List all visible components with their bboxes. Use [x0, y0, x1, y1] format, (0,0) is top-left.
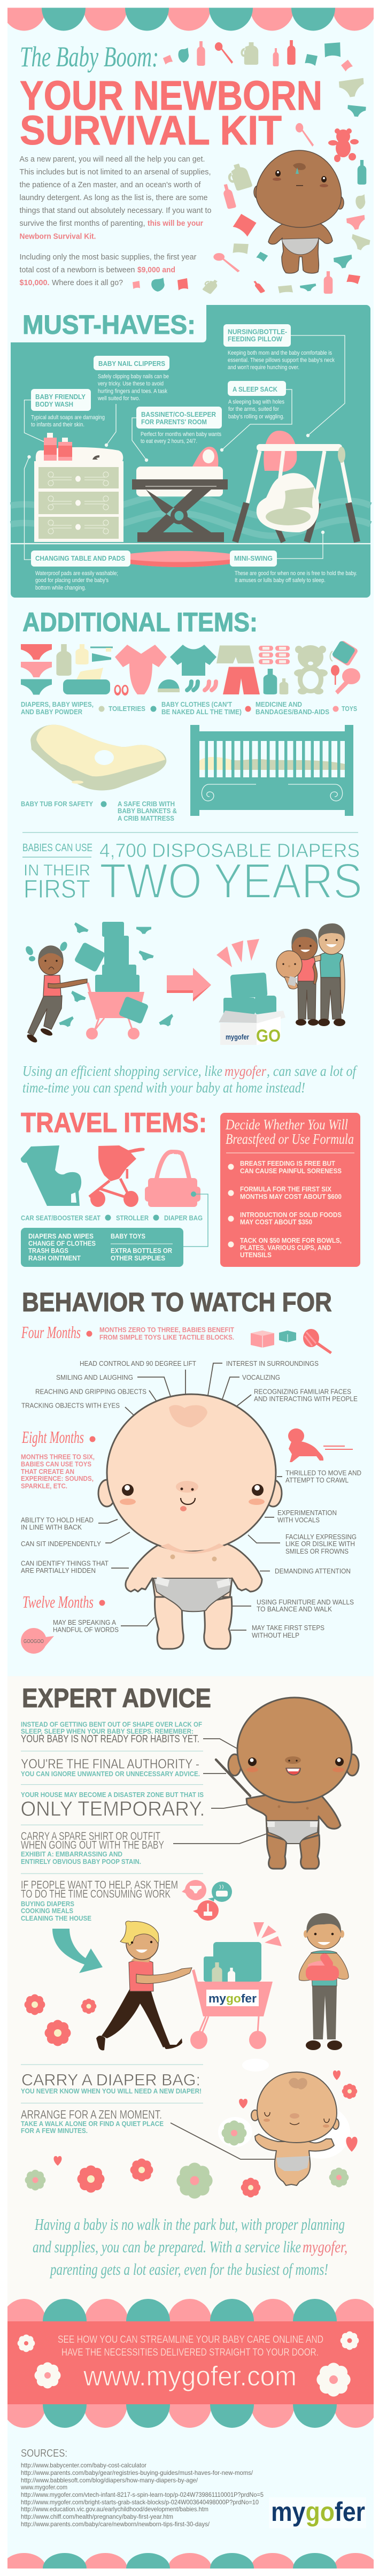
advice: zen moment: [21, 2108, 164, 2135]
intro text: As a new parent, you will need all the help you can get.: [19, 155, 205, 164]
sleep sack label: A SLEEP SACK: [233, 385, 278, 393]
panel: breastfeed or formula: Decide Whether You Will: [225, 1117, 348, 1133]
twelve months note: [22, 1592, 354, 1639]
hero baby: [253, 146, 346, 273]
icon: baby tub: [30, 725, 166, 791]
speech bubble: [21, 1628, 54, 1654]
sources: http://www.parents.com/baby/gear/registries-buying-guides/must-haves-for-new-moms/: [21, 2469, 253, 2476]
script callout: mygofer: , can save a lot of: [267, 1063, 358, 1079]
panel: breastfeed or formula: BREAST FEEDING IS FREE BUT: [240, 1159, 335, 1167]
milestone labels: eight months: ABILITY TO HOLD HEAD: [21, 1516, 94, 1524]
bassinet label: BASSINET/CO-SLEEPER: [141, 410, 216, 418]
body wash label: Typical adult soaps are damaging: [31, 414, 105, 421]
intro text: $10,000.: [19, 278, 49, 287]
sources: http://www.babycenter.com/baby-cost-calculator: [21, 2462, 146, 2469]
banner flowers: [18, 2332, 359, 2397]
bassinet label: FOR PARENTS' ROOM: [141, 418, 207, 426]
labels: additional items: DIAPERS, BABY WIPES,: [21, 700, 94, 708]
body wash label: BODY WASH: [35, 400, 73, 408]
milestone labels: four months: VOCALIZING: [242, 1373, 280, 1381]
nursing pillow label: NURSING/BOTTLE-: [228, 327, 287, 336]
twelve months note: HANDFUL OF WORDS: [53, 1626, 119, 1634]
advice: sleep: INSTEAD OF GETTING BENT OUT OF SHAPE OVER LACK OF: [21, 1721, 202, 1729]
illustration: man with laundry: [299, 1913, 349, 2050]
heading: must-haves: MUST-HAVES:: [22, 310, 196, 340]
panel: must-haves: [7, 302, 370, 598]
labels: additional items: AND BABY POWDER: [21, 708, 83, 716]
twelve months note: USING FURNITURE AND WALLS: [257, 1598, 354, 1606]
intro text: things that stand out absolutely necessary. If you want to: [19, 206, 212, 215]
labels: additional items: BANDAGES/BAND-AIDS: [256, 708, 329, 716]
sources: http://www.parents.com/baby/care/newborn/newborn-tips-first-30-days/: [21, 2520, 210, 2528]
eight months note: SPARKLE, ETC.: [21, 1482, 67, 1490]
milestone labels: four months: HEAD CONTROL AND 90 DEGREE LIFT: [80, 1359, 196, 1367]
sources: http://www.mygofer.com/bright-starts-grab-stack-blocks/p-024W003640498000P?prdNo=10: [21, 2498, 259, 2506]
icon: crawling baby: [288, 1428, 353, 1462]
nursing pillow label: Keeping both mom and the baby comfortable is: [228, 350, 332, 356]
intro text: total cost of a newborn is between: [19, 265, 135, 274]
changing table label: Waterproof pads are easily washable;: [35, 570, 118, 577]
heading: travel items: TRAVEL ITEMS:: [21, 1107, 207, 1138]
call to action banner: [7, 2321, 374, 2404]
advice: spare outfit: CARRY A SPARE SHIRT OR OUTFIT: [21, 1830, 160, 1843]
callout dots: [27, 434, 324, 534]
sleep sack label: [228, 381, 286, 420]
sources: http://www.babblesoft.com/blog/diapers/how-many-diapers-by-age/: [21, 2476, 198, 2484]
four months note: FROM SIMPLE TOYS LIKE TACTILE BLOCKS.: [99, 1333, 234, 1341]
callout lines: [25, 335, 345, 560]
sources: [20, 2448, 264, 2528]
milestone labels: eight months: THRILLED TO MOVE AND: [285, 1469, 361, 1477]
labels: additional items: BE NAKED ALL THE TIME): [161, 708, 242, 716]
advice: spare outfit: [21, 1830, 164, 1866]
title: SURVIVAL KIT: [20, 108, 282, 154]
milestone labels: eight months: EXPERIMENTATION: [277, 1509, 337, 1517]
intro text: Newborn Survival Kit.: [19, 232, 96, 241]
twelve months note: MAY BE SPEAKING A: [53, 1618, 116, 1626]
labels: additional items: TOYS: [342, 705, 357, 713]
advice dividers and lines: [21, 1739, 275, 2159]
arrow: [167, 968, 211, 1002]
panel: breastfeed or formula: Breastfeed or Use Formula: [226, 1131, 354, 1147]
labels: tub and crib: BABY BLANKETS &: [118, 807, 177, 815]
panel: breastfeed or formula: [220, 1113, 360, 1267]
sources: http://www.education.vic.gov.au/earlychildhood/development/babies.htm: [21, 2505, 208, 2513]
panel: breastfeed or formula: TACK ON $50 MORE FOR BOWLS,: [240, 1236, 342, 1244]
body wash label: [31, 389, 105, 428]
milestone labels: four months: AND INTERACTING WITH PEOPLE: [254, 1395, 358, 1403]
labels: additional items: [21, 700, 357, 716]
advice: final authority: [21, 1757, 200, 1778]
divider: [22, 832, 358, 833]
advice: sleep: [21, 1721, 202, 1745]
script callout: mygofer: time-time you can spend with your baby at home instead!: [22, 1080, 305, 1096]
mini-swing label: MINI-SWING: [234, 554, 273, 562]
icon: crib: [190, 725, 353, 816]
nail clippers label: [94, 356, 169, 402]
flowers: shopping scene: [25, 1994, 96, 2046]
labels: travel items: STROLLER: [116, 1214, 149, 1222]
nursing pillow label: [223, 324, 335, 371]
labels: tub and crib: [21, 800, 177, 822]
eight months note: THAT CREATE AN: [21, 1467, 74, 1476]
sources: SOURCES:: [21, 2448, 67, 2459]
illustration: happy family: [292, 926, 345, 1019]
labels: additional items: MEDICINE AND: [256, 700, 302, 708]
milestone labels: eight months: IN LINE WITH BACK: [21, 1523, 82, 1531]
nursing pillow label: essential. These pillows support the baby's neck: [228, 357, 335, 364]
panel: diaper bag contents: BABY TOYS: [111, 1232, 145, 1240]
milestone labels: four months: RECOGNIZING FAMILIAR FACES: [254, 1388, 351, 1395]
advice: ask for help: [21, 1879, 178, 1922]
illustration: woman with cart: [96, 1921, 282, 2051]
icons: help speech bubbles: [182, 1880, 232, 1921]
changing table label: good for placing under the baby's: [35, 577, 109, 584]
advice: final authority: YOU'RE THE FINAL AUTHORITY -: [21, 1757, 199, 1772]
mini-swing label: It amuses or lulls baby off safely to sleep.: [235, 577, 326, 584]
labels: additional items: BABY CLOTHES (CAN'T: [161, 700, 232, 708]
nail clippers label: well suited for two.: [97, 395, 140, 402]
title: YOUR NEWBORN: [20, 73, 322, 119]
milestone labels: eight months: ATTEMPT TO CRAWL: [285, 1476, 349, 1484]
script callout: mygofer: [22, 1063, 358, 1096]
script callout: mygofer: mygofer: [225, 1063, 266, 1079]
advice: ask for help: COOKING MEALS: [21, 1907, 73, 1915]
milestone labels: four months: SMILING AND LAUGHING: [56, 1373, 133, 1381]
nursing pillow label: and won't require hunching over.: [228, 364, 299, 371]
bassinet label: Perfect for months when baby wants: [141, 431, 221, 438]
milestone labels: eight months: ARE PARTIALLY HIDDEN: [21, 1566, 96, 1574]
icon: diaper bag: [145, 1152, 200, 1207]
background waves: [11, 494, 370, 536]
banner text: SEE HOW YOU CAN STREAMLINE YOUR BABY CARE ONLINE AND: [58, 2334, 323, 2345]
heading: behavior to watch for: BEHAVIOR TO WATCH FOR: [22, 1287, 332, 1317]
nursing pillow label: FEEDING PILLOW: [228, 335, 283, 343]
milestone labels: eight months: [21, 1469, 361, 1575]
icons: additional items: [21, 640, 360, 695]
milestone labels: four months: TRACKING OBJECTS WITH EYES: [21, 1402, 120, 1409]
eight months note: Eight Months: [21, 1427, 84, 1447]
call to action banner: www.mygofer.com: [83, 2361, 297, 2392]
milestone labels: eight months: WITH VOCALS: [277, 1516, 320, 1524]
sources: http://www.chiff.com/health/pregnancy/baby-first-year.htm: [21, 2513, 173, 2520]
advice: zen moment: ARRANGE FOR A ZEN MOMENT.: [21, 2108, 162, 2121]
heading: expert advice: EXPERT ADVICE: [22, 1683, 211, 1713]
box logo: mygofer: [226, 1033, 249, 1041]
bassinet label: [136, 407, 222, 445]
advice: ask for help: IF PEOPLE WANT TO HELP, ASK THEM: [21, 1879, 178, 1891]
title: The Baby Boom:: [20, 41, 159, 73]
labels: tub and crib: A SAFE CRIB WITH: [118, 800, 175, 808]
advice: ask for help: CLEANING THE HOUSE: [21, 1914, 91, 1922]
labels: additional items: TOILETRIES: [109, 705, 145, 713]
panel: breastfeed or formula: INTRODUCTION OF SOLID FOODS: [240, 1211, 342, 1219]
milestone labels: four months: [21, 1359, 358, 1409]
box go mark: GO: [256, 1026, 281, 1045]
diaper statistic: 4,700 DISPOSABLE DIAPERS: [99, 839, 360, 861]
top scallop border: [7, 7, 374, 31]
panel: diaper bag contents: OTHER SUPPLIES: [111, 1254, 165, 1262]
nail clippers label: Safely clipping baby nails can be: [98, 373, 169, 380]
intro text: This includes but is not limited to an arsenal of supplies,: [19, 167, 211, 177]
intro text: Where does it all go?: [52, 278, 123, 287]
flowers and hearts: [25, 2059, 358, 2199]
mygofer logo: mygofer: [271, 2497, 365, 2527]
changing table label: [31, 551, 130, 591]
body wash label: to infants and their skin.: [31, 422, 84, 428]
intro text: laundry detergent. As long as the list is, there are some: [19, 193, 207, 202]
diaper statistic: [22, 839, 362, 908]
advice: diaper bag: CARRY A DIAPER BAG:: [21, 2070, 200, 2089]
milestone labels: eight months: SMILES OR FROWNS: [285, 1547, 349, 1555]
milestone callout lines: [98, 1363, 282, 1630]
family faces and baby: [276, 923, 345, 1026]
sources: www.mygofer.com: [20, 2483, 67, 2491]
advice: zen moment: TAKE A WALK ALONE OR FIND A QUIET PLACE: [21, 2120, 164, 2128]
nail clippers label: hurting fingers and toes. A task: [98, 388, 167, 395]
twelve months note: Twelve Months: [22, 1592, 94, 1611]
icon: blocks and rattle: [251, 1329, 332, 1354]
expert baby illustration: [216, 1698, 359, 1869]
speech bubble: GOOGOO: [24, 1639, 44, 1645]
panel: diaper bag contents: RASH OINTMENT: [28, 1254, 81, 1262]
advice: temporary: YOUR HOUSE MAY BECOME A DISASTER ZONE BUT THAT IS: [21, 1791, 204, 1799]
illustration: stressed parent with cart: [24, 922, 176, 1044]
changing table label: bottom while changing.: [35, 585, 86, 591]
panel: diaper bag contents: DIAPERS AND WIPES: [28, 1232, 94, 1240]
labels: travel items: DIAPER BAG: [164, 1214, 203, 1222]
nail clippers label: BABY NAIL CLIPPERS: [98, 360, 165, 368]
twelve months note: WITHOUT HELP: [252, 1631, 299, 1639]
closing script message: [33, 2215, 347, 2279]
milestone labels: eight months: FACIALLY EXPRESSING: [285, 1533, 357, 1541]
mini-swing label: [230, 551, 357, 584]
sleeping baby illustration: [251, 2072, 339, 2185]
panel: breastfeed or formula: MAY COST ABOUT $350: [240, 1218, 312, 1226]
advice: zen moment: FOR A FEW MINUTES.: [21, 2127, 88, 2135]
curved arrow: [52, 1929, 103, 1973]
four months note: MONTHS ZERO TO THREE, BABIES BENEFIT: [99, 1326, 234, 1334]
panel: diaper bag contents: CHANGE OF CLOTHES: [28, 1239, 96, 1248]
labels: tub and crib: BABY TUB FOR SAFETY: [21, 800, 93, 808]
sources: http://www.mygofer.com/vtech-infant-8217-s-spin-learn-top/p-024W739861110001P?prdNo=5: [21, 2491, 264, 2498]
intro text: [19, 155, 212, 287]
advice: ask for help: BUYING DIAPERS: [21, 1900, 74, 1908]
milestone labels: four months: REACHING AND GRIPPING OBJECTS: [35, 1388, 146, 1395]
advice: diaper bag: YOU NEVER KNOW WHEN YOU WILL NEED A NEW DIAPER!: [21, 2087, 202, 2095]
heading: additional items: ADDITIONAL ITEMS:: [22, 607, 258, 637]
four months note: Four Months: [21, 1323, 81, 1342]
advice: ask for help: TO DO THE TIME CONSUMING WORK: [21, 1888, 171, 1900]
intro text: the patience of a Zen master, and an ocean's worth of: [19, 180, 201, 189]
advice: spare outfit: WHEN GOING OUT WITH THE BABY: [21, 1839, 164, 1851]
labels: travel items: [21, 1214, 203, 1222]
scattered baby supply icons: [133, 40, 370, 294]
changing table: [34, 433, 123, 542]
changing table label: CHANGING TABLE AND PADS: [35, 554, 125, 562]
diaper statistic: FIRST: [24, 875, 90, 904]
eight months note: MONTHS THREE TO SIX,: [21, 1453, 95, 1461]
intro text: Including only the most basic supplies, the first year: [19, 253, 197, 262]
nail clippers label: very tricky. Use these to avoid: [98, 381, 164, 387]
four months note: [21, 1323, 234, 1342]
bassinet: [132, 447, 228, 542]
advice: sleep: YOUR BABY IS NOT READY FOR HABITS YET.: [21, 1733, 199, 1745]
banner upper scallops: [7, 2299, 374, 2321]
milestone labels: eight months: LIKE OR DISLIKE WITH: [285, 1540, 355, 1548]
labels: travel items: CAR SEAT/BOOSTER SEAT: [21, 1214, 100, 1222]
labels: tub and crib: A CRIB MATTRESS: [118, 814, 174, 822]
eight months note: [21, 1427, 95, 1490]
script callout: mygofer: Using an efficient shopping service, like: [22, 1063, 222, 1079]
milestone labels: eight months: DEMANDING ATTENTION: [275, 1567, 351, 1575]
illustration: delivery box: [216, 939, 285, 1045]
mini-swing label: These are good for when no one is free to hold the baby.: [235, 570, 357, 577]
panel: breastfeed or formula: FORMULA FOR THE FIRST SIX: [240, 1185, 331, 1193]
sleep sack label: baby's rolling or wiggling.: [228, 414, 284, 420]
milestone labels: four months: INTEREST IN SURROUNDINGS: [226, 1359, 319, 1367]
twelve months note: MAY TAKE FIRST STEPS: [252, 1624, 324, 1632]
milestone labels: eight months: CAN IDENTIFY THINGS THAT: [21, 1559, 109, 1568]
icon: car seat: [21, 1145, 81, 1206]
sleep sack label: for the arms, suited for: [228, 406, 279, 412]
panel: breastfeed or formula: CAN CAUSE PAINFUL SORENESS: [240, 1167, 342, 1175]
twelve months note: TO BALANCE AND WALK: [257, 1605, 332, 1613]
bassinet label: to eat every 2 hours, 24/7.: [141, 438, 197, 445]
sleep sack label: A sleeping bag with holes: [228, 399, 284, 406]
bag connector: [183, 1194, 208, 1247]
call to action banner: HAVE THE NECESSITIES DELIVERED STRAIGHT TO YOUR DOOR.: [61, 2347, 319, 2358]
closing script message: mygofer,: [303, 2237, 347, 2256]
pink roll: [130, 551, 230, 567]
panel: diaper bag contents: EXTRA BOTTLES OR: [111, 1247, 173, 1255]
advice: final authority: YOU CAN IGNORE UNWANTED OR UNNECESSARY ADVICE.: [21, 1770, 200, 1778]
bottom scallop border: [7, 2553, 374, 2569]
advice: spare outfit: ENTIRELY OBVIOUS BABY POOP STAIN.: [21, 1858, 141, 1866]
milestone labels: eight months: CAN SIT INDEPENDENTLY: [21, 1540, 101, 1548]
title: [20, 41, 322, 154]
advice: sleep: SLEEP, SLEEP WHEN YOUR BABY SLEEPS. REMEMBER:: [21, 1727, 194, 1736]
panel: diaper bag contents: TRASH BAGS: [28, 1247, 68, 1255]
intro text: this will be your: [148, 219, 203, 228]
eight months note: EXPERIENCE: SOUNDS,: [21, 1474, 94, 1482]
intro text: $9,000 and: [137, 265, 175, 274]
banner lower scallops: [7, 2404, 374, 2428]
advice: temporary: ONLY TEMPORARY.: [20, 1798, 205, 1821]
diaper statistic: BABIES CAN USE: [22, 842, 92, 854]
mini-swing: [235, 431, 357, 542]
body wash label: BABY FRIENDLY: [35, 393, 86, 401]
eight months note: BABIES CAN USE TOYS: [21, 1460, 91, 1468]
intro text: survive the first months of parenting,: [19, 219, 145, 228]
diaper statistic: IN THEIR: [24, 861, 90, 880]
icon: stroller: [89, 1145, 145, 1207]
panel: breastfeed or formula: PLATES, VARIOUS CUPS, AND: [240, 1243, 331, 1252]
panel: breastfeed or formula: UTENSILS: [240, 1251, 272, 1259]
cart logo: mygofer: [208, 1992, 257, 2005]
panel: breastfeed or formula: MONTHS MAY COST ABOUT $600: [240, 1193, 342, 1201]
big baby illustration: [98, 1394, 282, 1649]
advice: spare outfit: EXHIBIT A: EMBARRASSING AND: [21, 1850, 122, 1858]
floor line: [11, 543, 370, 544]
panel: diaper bag contents: [21, 1228, 183, 1267]
